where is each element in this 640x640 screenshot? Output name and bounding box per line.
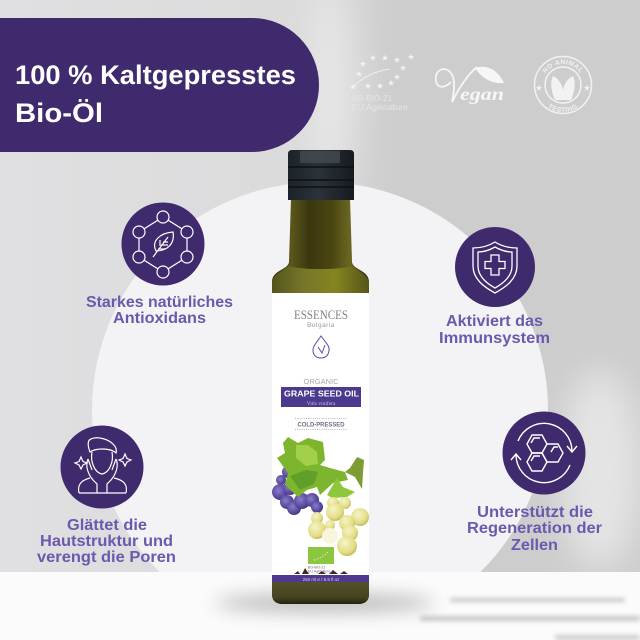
label: cell regeneration: Unterstützt die [477, 504, 593, 521]
label: skin: Hautstruktur und [40, 533, 173, 550]
icon: molecule with leaf [122, 202, 204, 286]
label: cell regeneration: Regeneration der [467, 520, 602, 537]
bottle label [272, 293, 369, 576]
bottle base [272, 582, 369, 604]
label: antioxidant: Starkes natürliches [86, 294, 233, 311]
bottle shoulder highlight [272, 266, 369, 293]
logo: no animal testing: TESTING [549, 104, 577, 112]
bottle cap [288, 150, 354, 200]
logo: EU organic: BG-BIO-21 [352, 94, 393, 103]
icon: drop [313, 336, 329, 358]
organic leaf logo [308, 547, 334, 574]
icon: woman with towel and sparkles [60, 426, 144, 508]
logo: vegan [436, 67, 504, 104]
bottle [272, 150, 369, 604]
organic leaf logo: EU Agriculture [308, 570, 330, 574]
logo: no animal testing [534, 56, 592, 114]
title text: Bio-Öl [15, 98, 103, 128]
label: cell regeneration: Zellen [511, 537, 558, 554]
logo: EU organic: EU Agriculture [352, 102, 408, 112]
icon: shield with cross [455, 227, 535, 307]
label: skin: Glättet die [67, 517, 147, 534]
product name box: GRAPE SEED OIL [284, 388, 359, 398]
brand sub-name: Bulgaria [307, 322, 335, 329]
feature: immune system [439, 227, 550, 347]
label: immune system: Aktiviert das [446, 313, 543, 330]
cold-pressed tag: COLD-PRESSED [298, 422, 345, 428]
title banner [0, 18, 319, 152]
label: skin: verengt die Poren [37, 549, 176, 566]
cold-pressed tag [295, 418, 347, 430]
logo: vegan: egan [460, 84, 504, 104]
volume band [272, 575, 369, 582]
feature: skin [37, 426, 176, 566]
logo: EU organic [350, 54, 414, 112]
product name box: Vitis vinifera [307, 400, 336, 407]
organic leaf logo: BG-BIO-21 [308, 566, 325, 570]
grape illustration [272, 437, 369, 556]
label: antioxidant: Antioxidans [113, 310, 206, 327]
logo: no animal testing: NO ANIMAL [542, 60, 582, 73]
brand name: ESSENCES [294, 307, 348, 322]
feature: cell regeneration [467, 412, 602, 554]
grape seeds [294, 568, 348, 574]
bottle glass [272, 198, 369, 604]
icon: cells with cycle arrows [502, 412, 586, 494]
product name box [281, 387, 361, 407]
organic text: ORGANIC [303, 377, 339, 386]
title text: 100 % Kaltgepresstes [15, 60, 296, 90]
label: immune system: Immunsystem [439, 330, 550, 347]
feature: antioxidant [86, 202, 233, 327]
volume band: 250 ml e / 8.5 fl oz [303, 577, 340, 582]
